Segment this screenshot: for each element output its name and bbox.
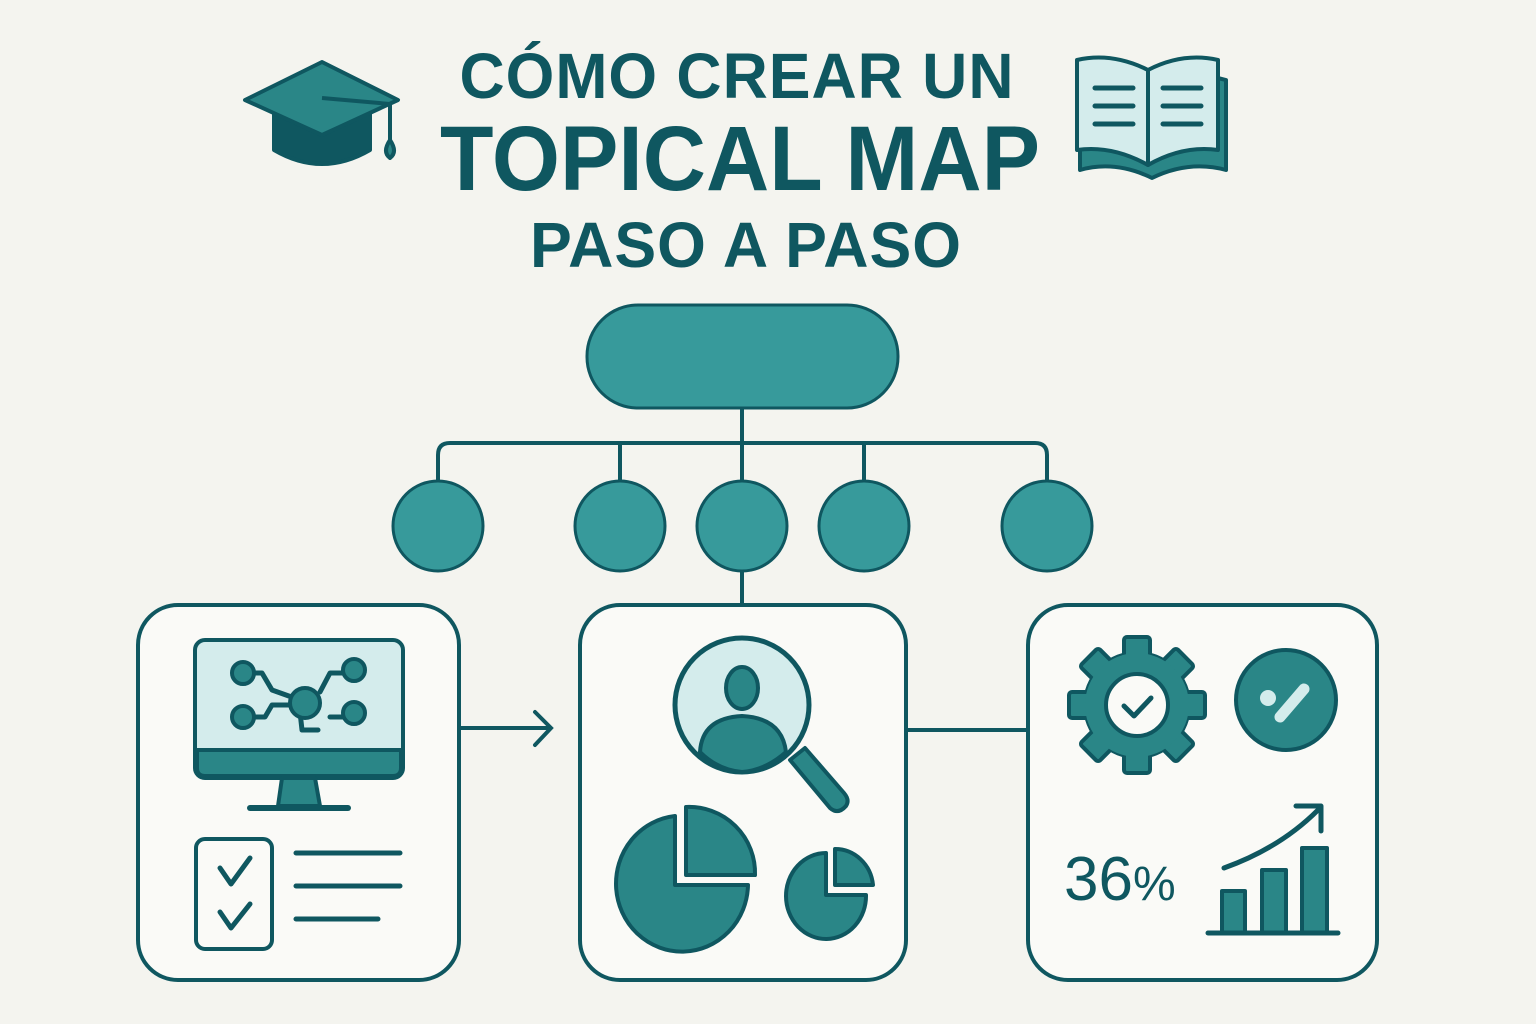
icon: checklist: [196, 839, 400, 949]
title: TOPICAL MAP: [440, 108, 1040, 210]
stat: 36%: 36%: [1064, 845, 1176, 914]
root node: [587, 305, 898, 408]
tree diagram: [438, 408, 1047, 606]
title: CÓMO CREAR UN: [460, 40, 1014, 112]
icon: graduation cap: [245, 62, 398, 164]
panel: right: [1028, 605, 1377, 980]
icon: check circle: [1236, 650, 1336, 750]
icon: open book: [1077, 58, 1226, 178]
bar chart with arrow: [1208, 806, 1338, 933]
panel: left: [138, 605, 459, 980]
title: PASO A PASO: [530, 209, 962, 281]
icon: magnifier with user: [675, 638, 848, 811]
child nodes: [393, 481, 1092, 571]
title: [440, 40, 1040, 281]
icon: gear with check: [1069, 637, 1205, 773]
connector middle to right: [906, 728, 1028, 732]
arrow: left to middle: [459, 712, 551, 745]
panel: middle: [580, 605, 906, 980]
icon: monitor with network: [195, 640, 403, 808]
icon: pie charts: [616, 807, 873, 952]
